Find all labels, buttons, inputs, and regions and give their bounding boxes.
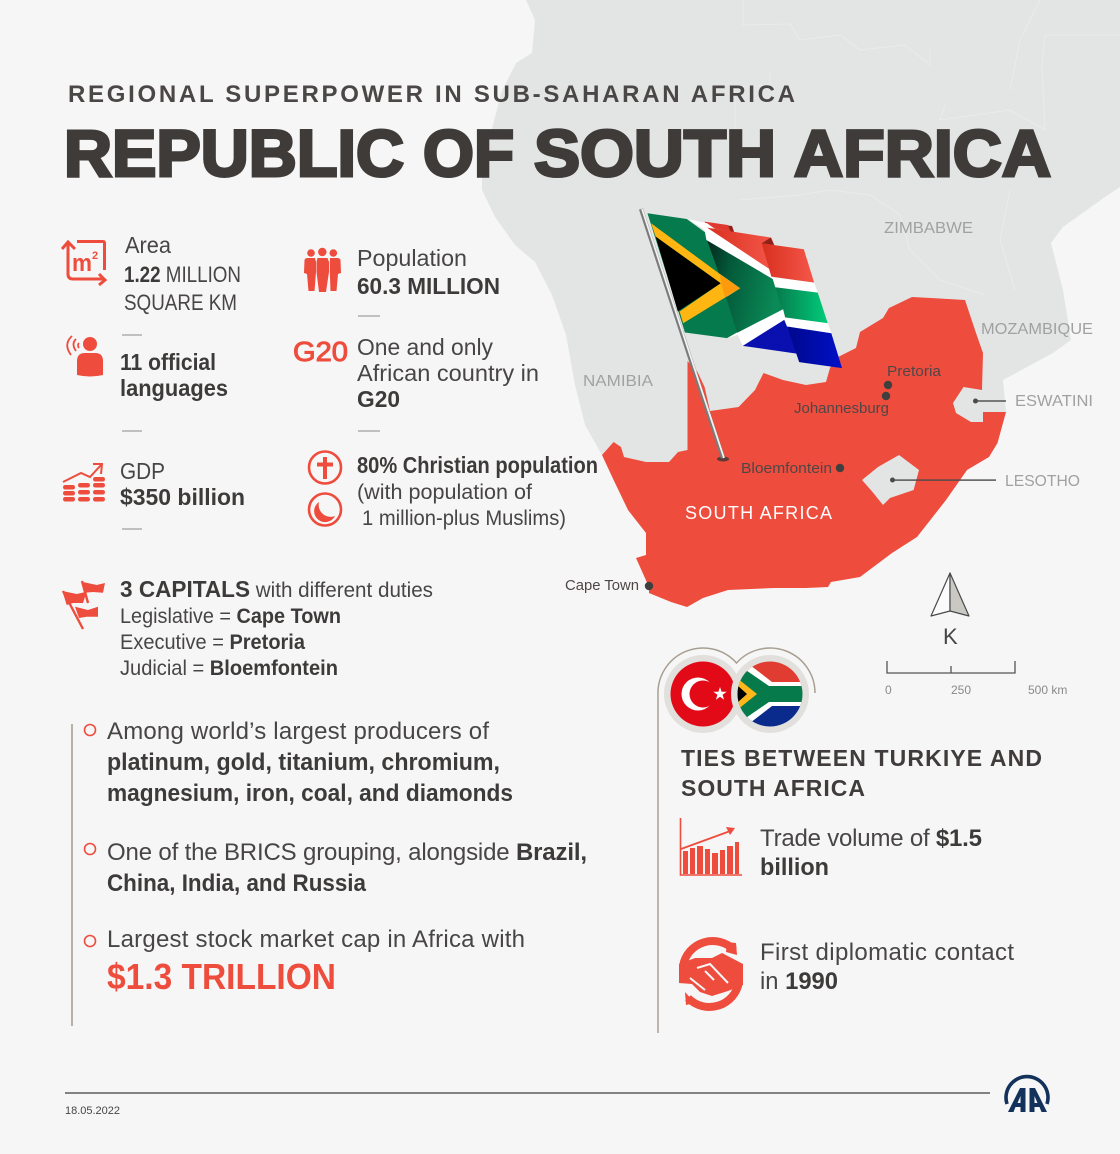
stat: G20 membership: One and only [357,334,493,360]
stat: capitals [62,576,433,680]
map: country labels: LESOTHO [1005,473,1080,490]
icon: three flags [62,581,105,629]
stat: religion: 1 million-plus Muslims) [362,507,566,530]
logo: Anadolu Agency [1006,1077,1048,1112]
stat: area: Area [125,232,171,258]
bullet: stock market: $1.3 TRILLION [107,956,336,997]
bullet: producers: platinum, gold, titanium, chromium, [107,749,500,776]
subtitle: REGIONAL SUPERPOWER IN SUB-SAHARAN AFRICA [68,81,795,108]
icon: cross in circle [309,452,341,484]
map: city labels and dots [565,363,942,594]
panel: ties between Turkiye and South Africa: First diplomatic contact [760,939,1014,966]
icon: crescent in circle [309,494,341,526]
stat: capitals: Executive = Pretoria [120,631,305,654]
map: country labels: SOUTH AFRICA [685,503,832,523]
title: OF [423,116,514,190]
panel: key facts [72,718,587,1026]
icon: three people [304,248,341,292]
stat: capitals: Legislative = Cape Town [120,605,341,628]
icon: handshake with circular arrows [679,941,743,1007]
bullet: BRICS: China, India, and Russia [107,870,367,897]
scale bar: 250 [951,683,971,697]
stat: capitals: 3 CAPITALS with different duties [120,576,433,602]
icon: speaking person [67,336,103,376]
scale bar: 500 km [1028,683,1067,697]
stat: GDP [63,458,245,510]
stat: area [62,232,241,315]
map: country labels: ESWATINI [1015,393,1093,410]
stat: population: Population [357,245,467,271]
map: country labels: ZIMBABWE [884,220,973,237]
icon: Turkish flag circle [664,655,742,733]
title: AFRICA [794,116,1051,190]
map: country labels: MOZAMBIQUE [981,321,1093,338]
panel: ties between Turkiye and South Africa: TIES BETWEEN TURKIYE AND [681,745,1042,771]
icon: G20 mark: G20 [293,336,348,367]
stat: G20 membership [293,334,539,412]
stat: religion: 80% Christian population [357,452,598,478]
icon: coins and rising arrow [63,464,105,502]
map: city labels and dots: Pretoria [887,363,942,380]
stat: area: SQUARE KM [124,290,237,315]
stat: G20 membership: G20 [357,386,400,412]
compass: K [943,624,958,649]
stat: G20 membership: African country in [357,360,539,386]
panel: ties between Turkiye and South Africa: in 1990 [760,968,838,995]
stat: population [304,245,500,299]
icon: South African flag circle [731,655,809,733]
bullet: producers: Among world’s largest producers of [107,718,489,745]
map: city labels and dots: Johannesburg [794,400,889,417]
icon: square metre: m [72,250,92,277]
footer line [65,1092,990,1094]
stat: GDP: $350 billion [120,484,245,510]
scale bar [885,661,1067,697]
stat: GDP: GDP [120,458,165,484]
dividers [122,316,380,529]
stat: religion [309,452,598,530]
title [64,116,1051,190]
bullet: producers: magnesium, iron, coal, and diamonds [107,780,513,807]
map: city labels and dots: Cape Town [565,577,639,594]
map: Eswatini and Lesotho leader lines [890,398,1006,482]
map: country labels: NAMIBIA [583,373,653,390]
stat: languages: languages [120,375,228,401]
map: city labels and dots: Bloemfontein [741,460,832,477]
map: surrounding southern Africa landmass [482,0,1120,512]
title: SOUTH [534,116,776,190]
stat: languages: 11 official [120,349,216,375]
icon: waving South African flag on pole [641,209,842,462]
panel: ties between Turkiye and South Africa [658,648,1042,1033]
map: South Africa country shape [602,297,1006,607]
panel: ties between Turkiye and South Africa: Trade volume of $1.5 [760,825,982,852]
icon: trade chart [680,818,742,875]
stat: religion: (with population of [357,481,532,504]
stat: capitals: Judicial = Bloemfontein [120,657,338,680]
bullet: stock market: Largest stock market cap in Africa with [107,926,525,953]
icon: square metre: 2 [92,250,98,262]
bullet: stock market [84,926,525,997]
scale bar: 0 [885,683,892,697]
stat: area: 1.22 MILLION [124,262,241,287]
icon: square metre [62,242,105,285]
compass [931,573,969,649]
bullet: BRICS [84,839,587,897]
panel: ties between Turkiye and South Africa: billion [760,854,829,881]
title: REPUBLIC [64,116,404,190]
date: 18.05.2022 [65,1105,120,1117]
stat: languages [67,336,228,401]
bullet: producers [84,718,513,807]
stat: population: 60.3 MILLION [357,273,500,299]
bullet: BRICS: One of the BRICS grouping, alongside Brazil, [107,839,587,866]
panel: ties between Turkiye and South Africa: SOUTH AFRICA [681,775,865,801]
map: country labels [583,220,1093,523]
